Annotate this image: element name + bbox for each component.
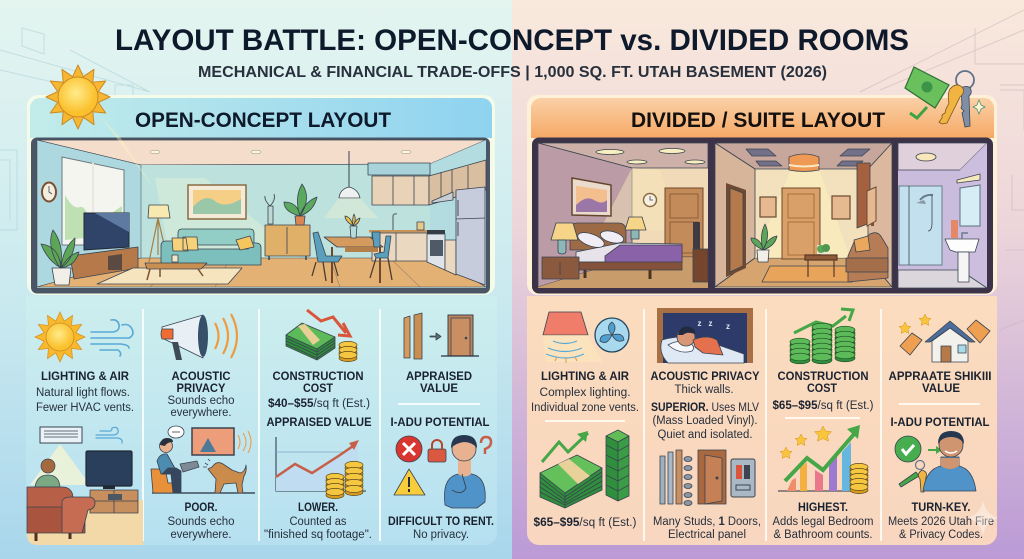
icon: window	[62, 157, 124, 245]
text: lighting and air: Individual zone vents.	[531, 402, 639, 414]
panel header: open-concept	[30, 98, 492, 138]
text: lower rating: "finished sq footage".	[264, 529, 372, 541]
icon: potted plant	[41, 230, 79, 285]
text: appraised value garbled: APPRAATE SHIKIII	[888, 371, 992, 383]
panel: divided / suite layout	[527, 95, 997, 295]
text: appraised value garbled: VALUE	[922, 383, 960, 395]
title: LAYOUT BATTLE: OPEN-CONCEPT vs. DIVIDED ROOMS	[115, 24, 909, 57]
icons: rent warnings and confused tenant	[394, 435, 491, 508]
text: appraised value garbled	[888, 371, 992, 395]
text: lower rating: Counted as	[290, 516, 347, 528]
text: highest rating	[772, 500, 874, 541]
text: appraised value	[406, 371, 472, 395]
column: appraised value and i-adu (open)	[388, 313, 494, 541]
text: construction cost: COST	[807, 383, 837, 395]
illustration: sleeper in soundproofed room: z z	[698, 319, 712, 328]
illustration: gamer and barking dog	[151, 426, 255, 493]
text: lighting and air	[36, 371, 134, 414]
illustration: divided rooms	[532, 138, 993, 294]
room: bathroom	[898, 143, 987, 288]
text: acoustic privacy: ACOUSTIC PRIVACY	[650, 371, 760, 383]
text: difficult to rent: DIFFICULT TO RENT.	[388, 514, 494, 528]
text: acoustic privacy: Quiet and isolated.	[658, 429, 752, 441]
text: poor rating	[168, 500, 234, 541]
icon: dining table and chairs	[312, 214, 392, 283]
icon: pendant lamp	[324, 151, 378, 218]
background: right half	[512, 0, 1024, 559]
text: lighting and air: Fewer HVAC vents.	[36, 402, 134, 414]
text: lighting and air: Natural light flows.	[36, 387, 130, 399]
icon: corner sparkle watermark	[968, 500, 998, 536]
column: acoustic privacy (divided)	[650, 308, 761, 541]
icon: coffee table	[145, 255, 207, 280]
icon: studs, door and electrical panel	[660, 450, 755, 506]
text: turn-key: TURN-KEY.	[912, 500, 970, 514]
subtitle: MECHANICAL & FINANCIAL TRADE-OFFS | 1,000 SQ. FT. UTAH BASEMENT (2026)	[198, 64, 827, 81]
icon: falling money	[286, 310, 357, 362]
text: construction cost: $65–$95/sq ft (Est.)	[772, 400, 874, 412]
column: lighting and air (open)	[27, 312, 143, 545]
text: lighting and air: LIGHTING & AIR	[41, 371, 130, 383]
chart: highest value growth	[778, 425, 868, 494]
panel: open-concept metrics	[26, 296, 497, 545]
icon: wall clock	[42, 182, 56, 202]
text: acoustic privacy: ACOUSTIC	[172, 371, 230, 383]
illustration: open living room	[31, 138, 490, 294]
text: difficult to rent: No privacy.	[413, 529, 469, 541]
text: acoustic privacy: SUPERIOR. Uses MLV	[651, 402, 759, 414]
column: construction cost (open)	[264, 310, 372, 541]
column: acoustic privacy (open)	[151, 314, 255, 541]
icon: floor lamp	[148, 205, 170, 262]
icon: kitchen cabinets and appliances	[368, 160, 486, 285]
text: construction cost: COST	[303, 383, 333, 395]
text: lower rating	[264, 500, 372, 541]
text: construction cost	[268, 371, 370, 410]
text: poor rating: Sounds echo	[168, 516, 234, 528]
text: highest rating: & Bathroom counts.	[774, 529, 872, 541]
text: studs and doors: Electrical panel	[668, 529, 746, 541]
text: lower rating: LOWER.	[298, 500, 338, 514]
text: highest rating: HIGHEST.	[798, 500, 848, 514]
text: acoustic privacy: Sounds echo	[168, 395, 234, 407]
icon: sideboard with plant	[265, 184, 317, 260]
icon: cash, keys and check	[905, 67, 985, 127]
column: construction cost (divided)	[772, 309, 874, 541]
icon: sun and wind	[35, 312, 133, 362]
chart: appraised value trend	[276, 437, 366, 499]
text: poor rating: everywhere.	[170, 529, 232, 541]
text: acoustic privacy: everywhere.	[170, 407, 232, 419]
text: acoustic privacy: Thick walls.	[674, 384, 734, 396]
text: lighting and air: LIGHTING & AIR	[541, 371, 630, 383]
text: construction cost: CONSTRUCTION	[272, 371, 364, 383]
text: acoustic privacy	[168, 371, 234, 419]
text: construction cost: $40–$55/sq ft (Est.)	[268, 398, 370, 410]
illustration: viewer on couch	[27, 427, 143, 545]
text: highest rating: Adds legal Bedroom	[772, 516, 874, 528]
icons: approved and happy tenant	[895, 431, 976, 492]
text: poor rating: POOR.	[184, 500, 218, 514]
icon: television and stand	[70, 213, 138, 279]
icon: sofa	[161, 229, 261, 265]
text: lighting and air: Complex lighting.	[540, 387, 630, 399]
icon: high cost money stacks	[540, 430, 629, 508]
text: studs and doors	[653, 516, 761, 541]
icon: lamp and zone fan	[543, 312, 629, 363]
text: appraised value heading: APPRAISED VALUE	[266, 417, 372, 429]
text: construction cost	[772, 371, 874, 412]
text: lighting and air	[531, 371, 639, 414]
room: bedroom	[538, 143, 708, 288]
icon: sun corner	[46, 65, 155, 190]
illustration: sleeper in soundproofed room	[657, 308, 753, 363]
text: turn-key	[888, 500, 994, 541]
text: acoustic privacy	[650, 371, 760, 441]
text: i-adu potential: I-ADU POTENTIAL	[390, 417, 490, 429]
text: divided price: $65–$95/sq ft (Est.)	[534, 517, 637, 529]
text: construction cost: CONSTRUCTION	[778, 371, 868, 383]
text: appraised value: APPRAISED	[406, 371, 472, 383]
text: difficult to rent	[388, 514, 494, 541]
text: studs and doors: Many Studs, 1 Doors,	[653, 516, 761, 528]
panel: divided metrics	[527, 296, 997, 545]
icon: house with tags and stars	[899, 314, 990, 362]
icon: rising coin stacks	[790, 309, 855, 364]
column: value and i-adu (divided)	[888, 314, 994, 541]
text: i-adu potential: I-ADU POTENTIAL	[890, 417, 990, 429]
panel: open-concept layout	[27, 95, 495, 295]
text: turn-key: & Privacy Codes.	[899, 529, 983, 541]
panel header: divided	[531, 98, 994, 138]
icon: megaphone	[161, 314, 237, 360]
icon: wall picture	[188, 185, 246, 219]
icon: studs to door	[404, 313, 479, 359]
column: lighting and air (divided)	[531, 312, 639, 529]
text: acoustic privacy: PRIVACY	[176, 383, 226, 395]
illustration: sleeper in soundproofed room: z	[726, 322, 730, 331]
room: living area	[715, 143, 892, 288]
text: turn-key: Meets 2026 Utah Fire	[888, 516, 994, 528]
text: appraised value: VALUE	[420, 383, 458, 395]
background: left half	[0, 0, 512, 559]
panel header: open-concept: OPEN-CONCEPT LAYOUT	[135, 109, 391, 132]
panel header: divided: DIVIDED / SUITE LAYOUT	[631, 109, 885, 132]
icon: rug	[97, 268, 242, 284]
text: acoustic privacy: (Mass Loaded Vinyl).	[652, 415, 758, 427]
